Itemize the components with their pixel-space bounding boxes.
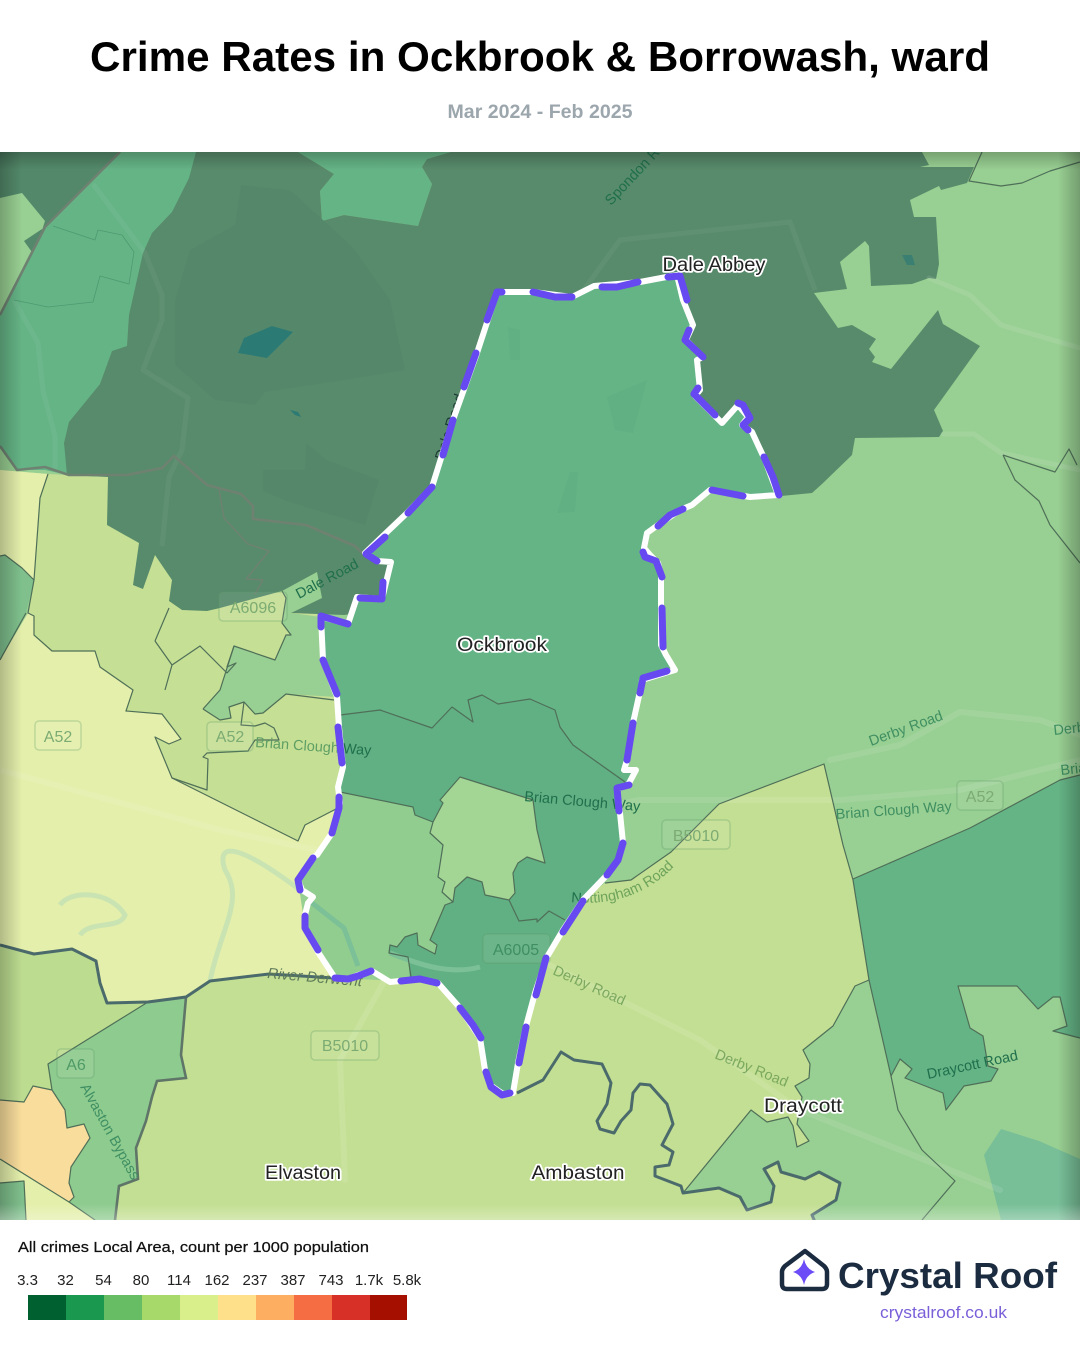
legend colour scale	[28, 1295, 407, 1320]
map base: mid green areas	[0, 152, 1080, 1220]
legend	[17, 1239, 422, 1320]
legend tick labels: 162	[204, 1272, 230, 1289]
shield: A6005: A6005	[493, 942, 539, 959]
region: west teal-green sliver	[0, 555, 34, 660]
county boundary lines	[0, 152, 362, 594]
shield: B5010 east	[662, 820, 730, 849]
label: Draycott Road: Draycott Road	[926, 1048, 1019, 1083]
ward zone: central Borrowash	[430, 777, 545, 902]
shield: B5010 east: B5010	[673, 828, 719, 845]
shield: B5010 south	[311, 1031, 379, 1060]
shield: A52 east	[957, 781, 1003, 810]
ward sub-area boundary lines	[0, 152, 1080, 1220]
label: road label partly hidden by ward: Dale Road	[433, 392, 468, 462]
ward woodland patches	[607, 380, 647, 433]
ward fill: Ockbrook and Borrowash	[310, 280, 774, 1091]
road shields	[35, 592, 1003, 1078]
legend tick labels: 80	[133, 1272, 149, 1289]
region: river south yellow-green west	[0, 945, 148, 1102]
legend tick labels: 5.8k	[393, 1272, 422, 1289]
woodland: darker patch lower	[263, 443, 379, 525]
roads through north dark area	[14, 184, 815, 546]
label: Nottingham Road: Nottingham Road	[572, 860, 674, 904]
region: Alvaston mid green	[48, 997, 188, 1220]
shield: A52 centre	[207, 722, 253, 751]
ward main fill	[324, 280, 774, 781]
subtitle: date range: Mar 2024 - Feb 2025	[448, 102, 633, 123]
shield: A52 west: A52	[44, 729, 72, 746]
region: west yellow-green	[0, 470, 340, 841]
shield: A6	[57, 1049, 94, 1078]
legend tick labels: 743	[318, 1272, 344, 1289]
lake: Locko pond	[238, 326, 293, 358]
legend tick labels: 237	[242, 1272, 268, 1289]
region: north dark low-crime area	[64, 152, 980, 615]
shield: A6: A6	[66, 1057, 86, 1074]
label: Derby Road lower: Derby Road	[713, 1047, 790, 1091]
region: left medium green	[0, 152, 210, 480]
legend tick labels: 54	[95, 1272, 112, 1289]
region: top medium green patch	[298, 152, 451, 226]
ward boundary: purple dashes	[298, 276, 779, 1095]
region: south yellow-green	[115, 764, 869, 1220]
woodland: darker patch in north	[322, 219, 324, 221]
legend tick labels: 387	[280, 1272, 306, 1289]
place: Dale Abbey: Dale Abbey	[662, 255, 766, 276]
region: Spondon-side mid green	[204, 592, 334, 720]
shield: A52 centre: A52	[216, 729, 244, 746]
district boundary: Alvaston	[115, 997, 186, 1220]
shield: A6005	[483, 934, 550, 963]
place: Draycott: Draycott	[764, 1096, 843, 1117]
place: Ambaston: Ambaston	[532, 1163, 624, 1184]
shield: B5010 south: B5010	[322, 1038, 368, 1055]
shield: A52 west	[35, 721, 81, 750]
road labels	[80, 152, 1080, 1180]
label: Brian Clough Way west: Brian Clough Way	[255, 735, 373, 759]
shield: A6096	[219, 592, 287, 621]
legend tick labels	[17, 1272, 422, 1289]
legend tick labels: 114	[167, 1272, 191, 1289]
place: Elvaston: Elvaston	[265, 1163, 341, 1184]
icon: house with star	[782, 1251, 827, 1289]
region: orange high-crime area	[0, 1086, 90, 1202]
map edge vignette	[0, 152, 1080, 1220]
label: Alvaston Bypass: Alvaston Bypass	[77, 1081, 142, 1183]
region: east medium green	[853, 775, 1080, 1110]
title: Crime Rates in Ockbrook & Borrowash, ward	[90, 33, 990, 80]
shield: A52 east: A52	[966, 789, 994, 806]
label: Spondon Road: Spondon Road	[602, 127, 680, 209]
label: Brian Clough Way east: Brian Clough Way	[835, 799, 953, 823]
region: south-west pale yellow	[0, 613, 336, 1003]
reservoir lake bottom right	[984, 1129, 1080, 1220]
road network: subtle light lines	[337, 276, 1080, 1193]
region: top-left dark area	[0, 152, 120, 255]
region: north-west pale yellow strip	[0, 470, 48, 580]
ward zone: west Borrowash	[302, 793, 452, 979]
legend tick labels: 32	[57, 1272, 74, 1289]
label: Derby Road centre: Derby Road	[550, 963, 628, 1009]
River Derwent	[0, 945, 840, 1222]
logo: Crystal Roof	[782, 1251, 1058, 1322]
legend title: All crimes Local Area, count per 1000 population	[18, 1239, 369, 1256]
place: Ockbrook: Ockbrook	[457, 635, 548, 656]
place labels	[265, 255, 843, 1184]
pond	[290, 410, 301, 417]
pond east	[902, 255, 915, 265]
label: Brian Clough Way centre: Brian Clough Way	[524, 789, 642, 815]
region: bottom-left green	[0, 1181, 26, 1220]
label: River Derwent: River Derwent	[267, 965, 364, 990]
legend tick labels: 3.3	[17, 1272, 38, 1289]
website link: crystalroof.co.uk	[880, 1304, 1008, 1322]
canal channel	[312, 903, 480, 970]
ward lower darker zone	[340, 695, 640, 1100]
ward boundary: white line	[298, 275, 778, 1094]
wordmark: Crystal Roof	[838, 1255, 1058, 1296]
region: Alvaston lower green	[115, 1186, 150, 1220]
label: Dale Road west: Dale Road	[293, 556, 361, 603]
old river course	[60, 851, 300, 981]
region: bottom-left pale yellow	[0, 1159, 95, 1220]
shield: A6096: A6096	[230, 600, 276, 617]
label: Derby Road north-east: Derby Road	[867, 708, 945, 750]
legend tick labels: 1.7k	[355, 1272, 384, 1289]
